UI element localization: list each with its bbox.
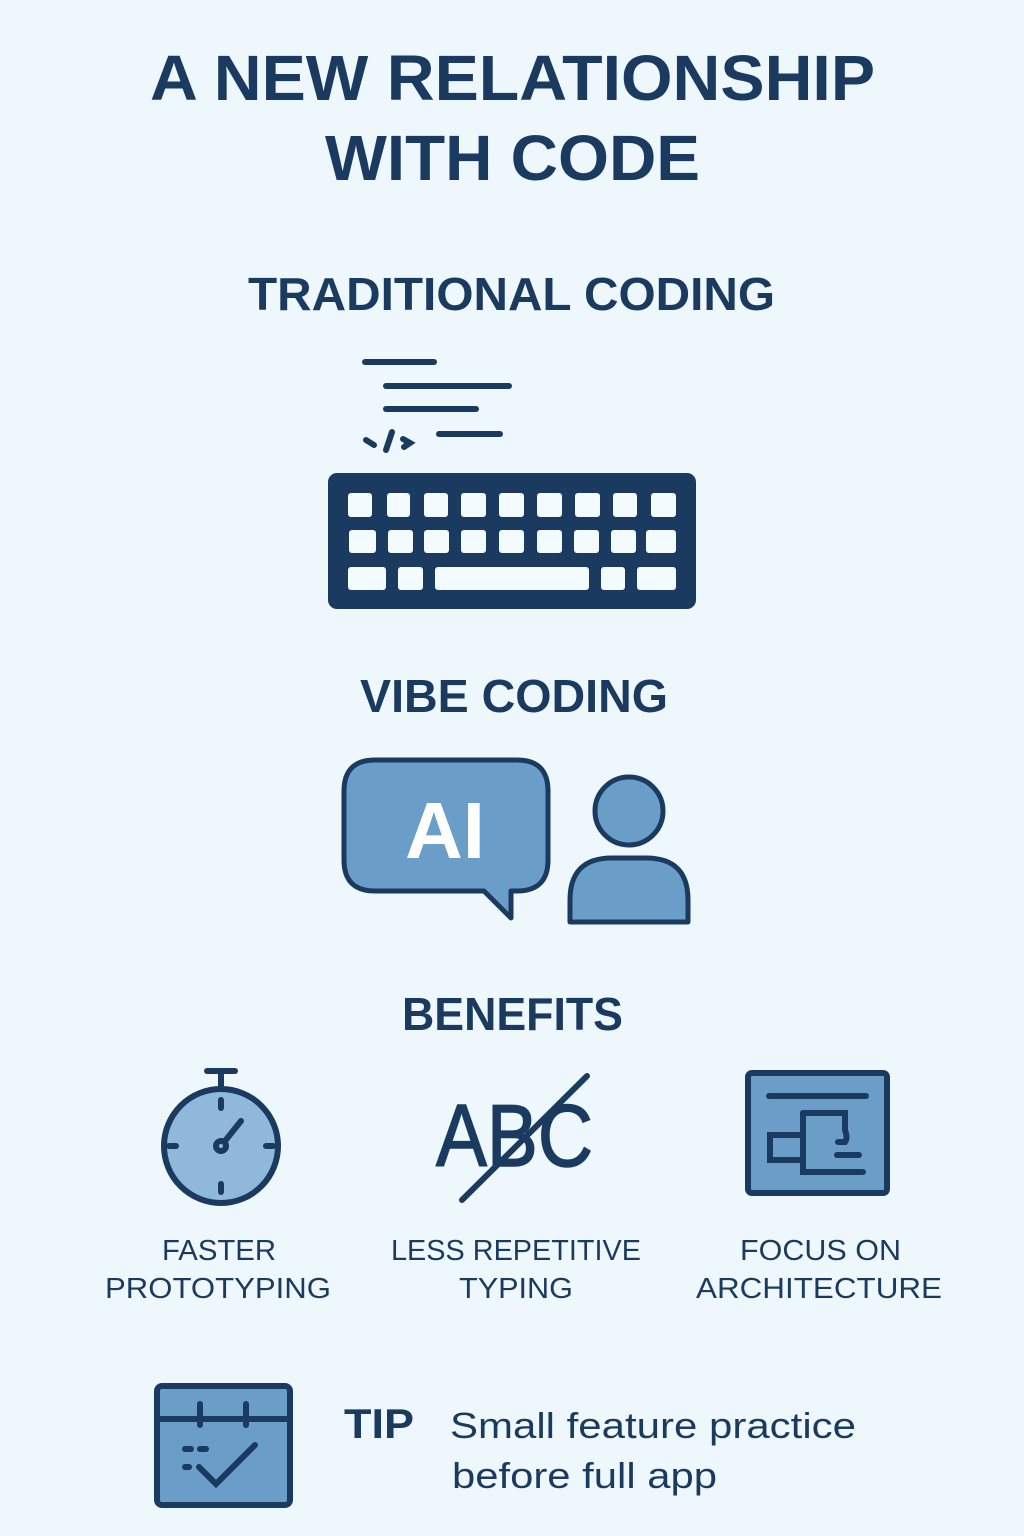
icon: calendar check — [157, 1386, 290, 1505]
icon: code lines — [365, 362, 509, 450]
label: LESS REPETITIVE — [391, 1235, 641, 1267]
icon: architecture window — [748, 1073, 887, 1193]
benefit: focus on architecture — [696, 1073, 942, 1305]
label — [391, 1235, 641, 1305]
tip text — [450, 1405, 856, 1496]
icon: AI chat bubble: AI — [405, 786, 485, 875]
tip text: Small feature practice — [450, 1405, 856, 1446]
heading: vibe coding: VIBE CODING — [360, 670, 668, 722]
label: PROTOTYPING — [105, 1273, 331, 1305]
title: A NEW RELATIONSHIP — [150, 42, 875, 114]
icon: stopwatch — [164, 1071, 278, 1203]
label: FASTER — [162, 1235, 276, 1267]
benefit: less repetitive typing — [391, 1076, 641, 1305]
tip label: TIP — [344, 1400, 414, 1447]
heading: traditional coding: TRADITIONAL CODING — [248, 268, 775, 320]
icon: crossed ABC: ABC — [436, 1086, 593, 1185]
tip text: before full app — [452, 1455, 717, 1496]
label: TYPING — [459, 1273, 573, 1305]
title — [150, 42, 875, 194]
label — [696, 1235, 942, 1305]
title: WITH CODE — [325, 122, 700, 194]
heading: benefits: BENEFITS — [402, 988, 623, 1040]
icon: keyboard — [328, 473, 696, 609]
label — [105, 1235, 331, 1305]
label: ARCHITECTURE — [696, 1273, 942, 1305]
label: FOCUS ON — [740, 1235, 901, 1267]
icon: AI chat bubble — [344, 760, 548, 918]
benefit: faster prototyping — [105, 1071, 331, 1305]
icon: person — [570, 777, 688, 922]
